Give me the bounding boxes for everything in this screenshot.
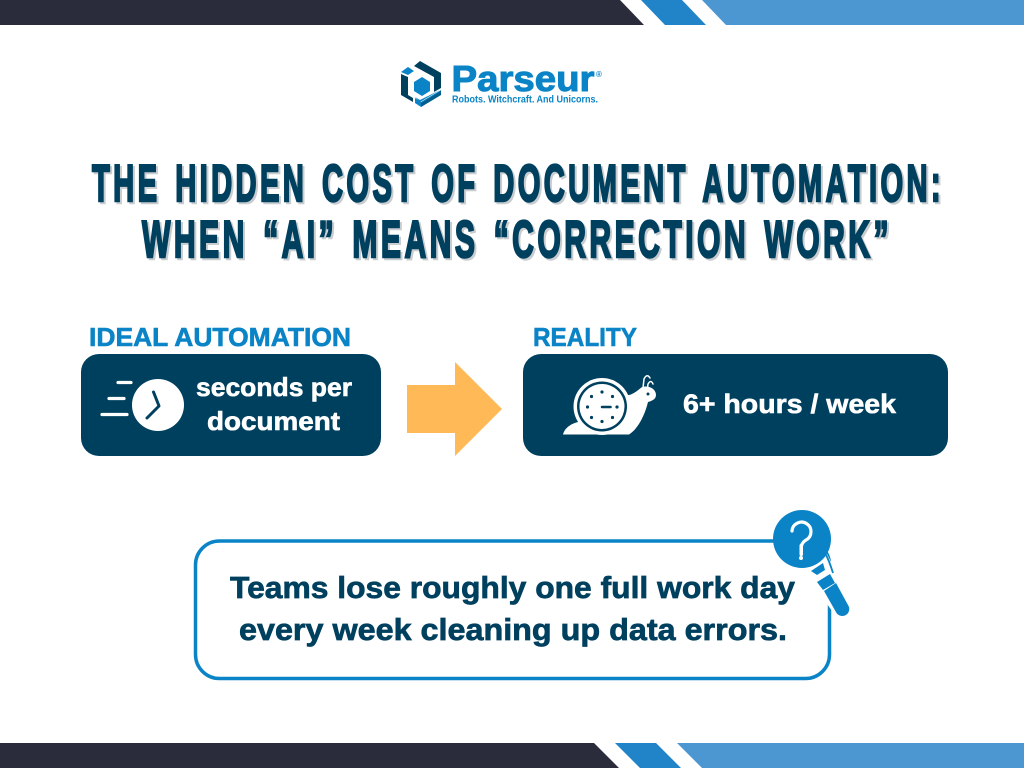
text: seconds per document xyxy=(196,372,352,436)
logo wordmark: Parseur xyxy=(452,58,594,99)
icon: hexagon logo mark xyxy=(401,61,441,107)
heading: ideal automation: IDEAL AUTOMATION xyxy=(89,322,351,352)
icon: magnifying glass with question mark xyxy=(773,510,852,622)
title shadow xyxy=(94,157,946,271)
logo tagline: Robots. Witchcraft. And Unicorns. xyxy=(452,94,598,106)
registered mark: ® xyxy=(596,70,602,79)
logo: Parseur xyxy=(401,58,602,107)
icon: fast clock xyxy=(102,379,184,431)
top decorative banner xyxy=(0,0,1024,25)
bottom decorative banner xyxy=(0,743,1024,768)
arrow xyxy=(407,362,502,456)
callout text: Teams lose roughly one full work day xyxy=(230,570,796,605)
text: seconds per document: seconds per xyxy=(196,372,352,402)
text: 6+ hours / week: 6+ hours / week xyxy=(683,389,897,419)
callout text xyxy=(230,570,796,647)
title xyxy=(92,155,946,271)
icon: snail with clock xyxy=(563,376,656,435)
text: seconds per document: document xyxy=(207,406,340,436)
panel: reality xyxy=(523,354,948,456)
callout text: every week cleaning up data errors. xyxy=(239,612,787,647)
heading: reality: REALITY xyxy=(533,322,637,352)
callout xyxy=(196,510,852,678)
panel: ideal automation xyxy=(81,354,381,456)
